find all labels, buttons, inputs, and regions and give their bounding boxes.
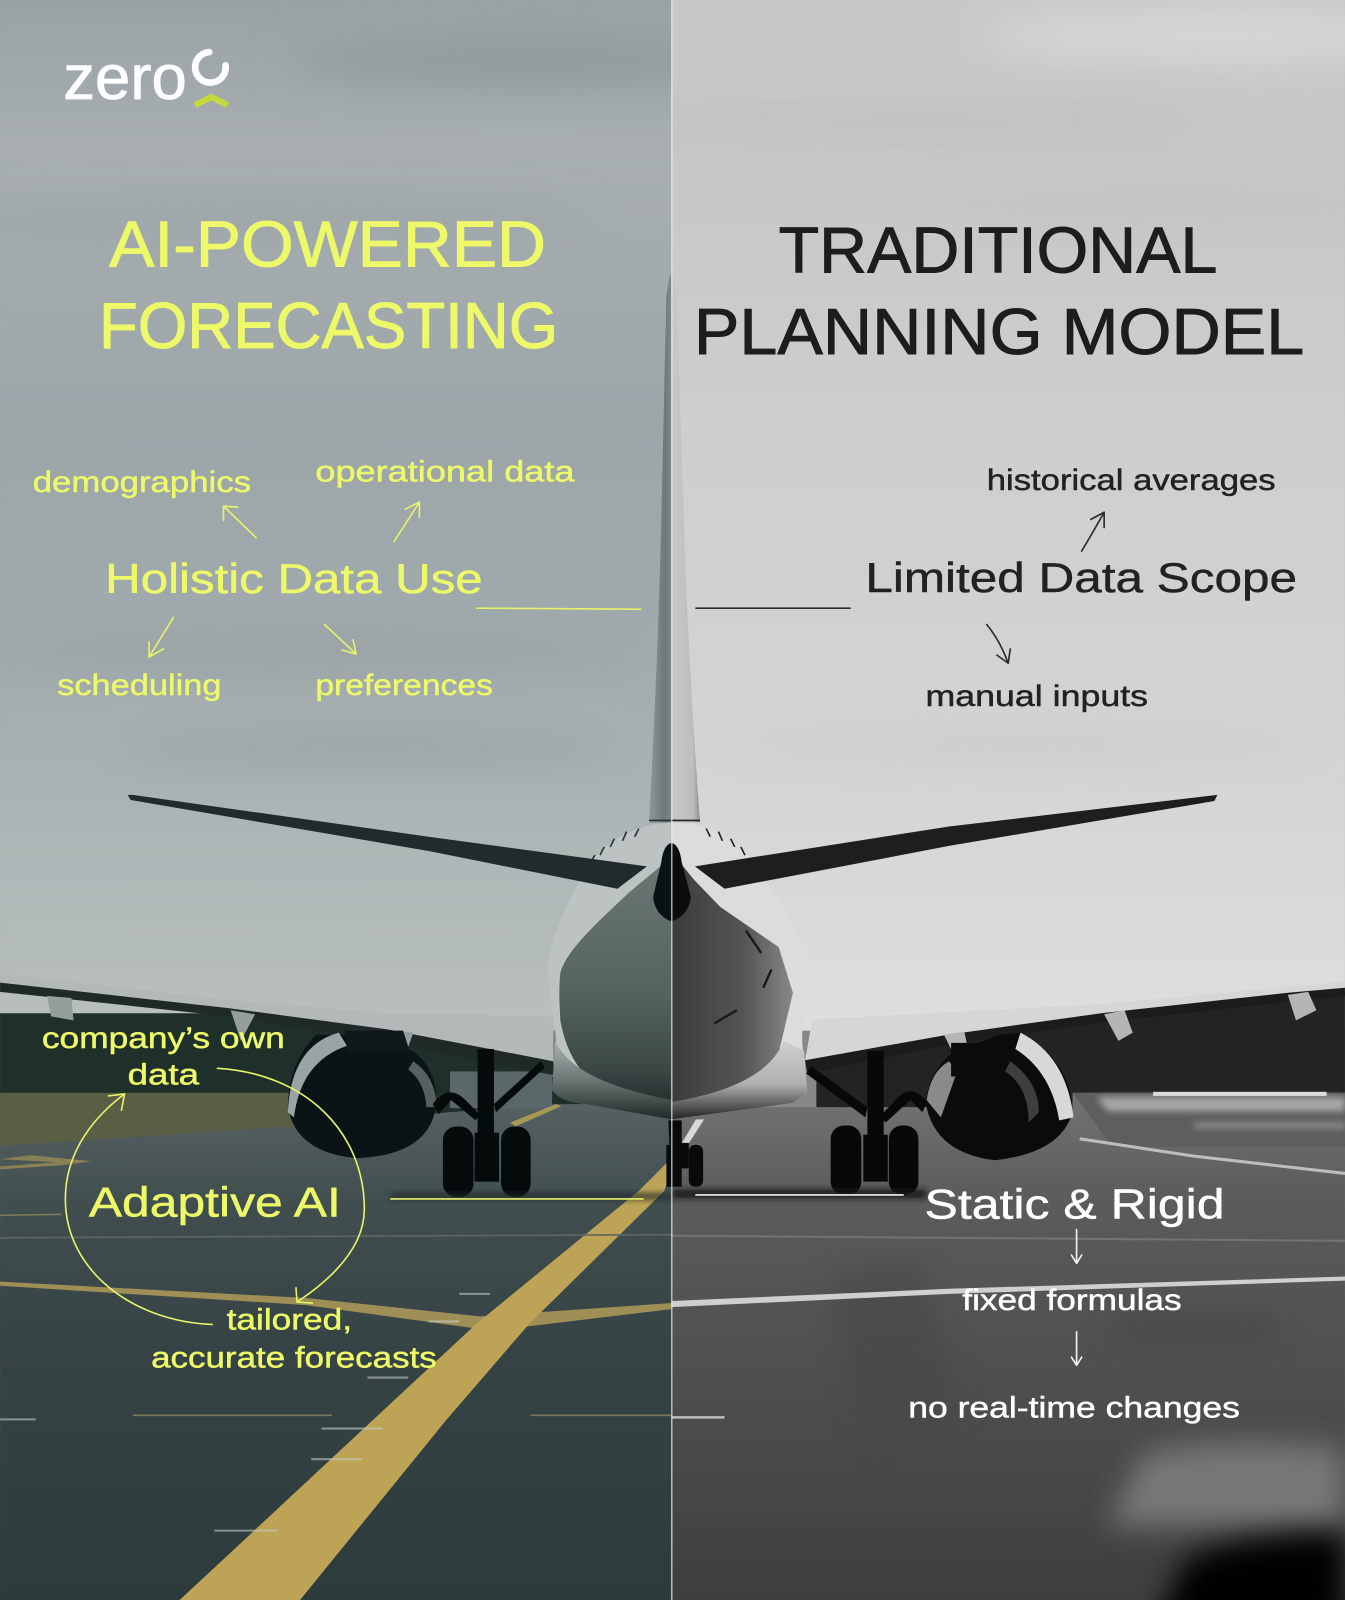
panel: traditional photo side [612, 0, 1345, 1600]
wing fairings [944, 992, 1316, 1050]
heading: traditional planning model [694, 213, 1304, 368]
runway markings right [671, 1139, 1345, 1417]
panel: adaptive AI cycle [42, 1022, 643, 1374]
heading: AI-powered forecasting: FORECASTING [99, 289, 558, 362]
connector line static [696, 1194, 903, 1196]
subheading: Holistic Data Use: Holistic Data Use [105, 555, 483, 602]
heading: traditional planning model: PLANNING MODEL [694, 295, 1304, 368]
lower fairing [552, 1041, 671, 1119]
left stabiliser [128, 795, 647, 889]
connector line left [477, 608, 641, 609]
grass left [0, 1093, 306, 1146]
right wing [805, 1030, 977, 1060]
arrow: to historical averages [1082, 512, 1104, 551]
tarmac left [0, 1104, 671, 1600]
label: company's own data: company’s own [42, 1022, 285, 1055]
shadow patches on tarmac [829, 1257, 1276, 1437]
icon: logo chevron [195, 97, 228, 105]
blur patches [1107, 1442, 1345, 1600]
vertical tail [649, 273, 671, 822]
main gear left [433, 1049, 545, 1197]
tarmac right [671, 1093, 1345, 1600]
arrow: to operational data [394, 502, 419, 542]
subheading: Adaptive AI: Adaptive AI [89, 1178, 341, 1225]
label: operational data: operational data [315, 456, 575, 489]
belly [559, 857, 671, 1107]
lower fairing [671, 1041, 807, 1119]
fuselage details [714, 931, 771, 1023]
plane left half [0, 273, 671, 1197]
sky right [612, 0, 1345, 1031]
arrow: to no real-time changes [1071, 1332, 1082, 1365]
connector line right [696, 607, 850, 609]
label: historical averages: historical averages [987, 464, 1276, 497]
heading: AI-powered forecasting: AI-POWERED [109, 207, 546, 280]
divider line [671, 0, 672, 1600]
distant building left [450, 1071, 552, 1108]
right stabiliser [695, 795, 1217, 889]
ground shadow right [671, 1190, 927, 1198]
panel: limited data scope [696, 464, 1297, 713]
runway markings left [0, 1104, 671, 1600]
vertical tail [672, 370, 700, 822]
heading: traditional planning model: TRADITIONAL [779, 213, 1217, 286]
fuselage [672, 1030, 808, 1120]
engine right [926, 1033, 1074, 1160]
subheading: Static & Rigid: Static & Rigid [925, 1180, 1225, 1227]
tail base line and ticks [671, 820, 745, 855]
arrow: to manual inputs [987, 624, 1010, 663]
label: manual inputs: manual inputs [926, 680, 1148, 713]
arrow: cycle right [217, 1068, 364, 1303]
nose gear left [666, 1120, 671, 1187]
fuselage [548, 822, 671, 1119]
grass right [1072, 1092, 1345, 1147]
label: tailored, accurate forecasts [151, 1304, 437, 1374]
subheading: Limited Data Scope: Limited Data Scope [865, 554, 1297, 601]
label: fixed formulas: fixed formulas [962, 1284, 1182, 1317]
belly [671, 852, 793, 1108]
arrow: to demographics [224, 506, 256, 538]
label: preferences: preferences [315, 669, 493, 702]
label: company's own data: data [128, 1059, 200, 1092]
trees right [816, 992, 1345, 1112]
panel: AI-powered photo side [0, 0, 672, 1600]
ground shadow left [391, 1194, 671, 1199]
exhaust cone [671, 843, 691, 921]
connector line adaptive [391, 1198, 643, 1200]
label: scheduling: scheduling [57, 669, 221, 702]
plane right half [672, 370, 1345, 1195]
wing fairings [47, 996, 414, 1047]
left wing [399, 1030, 554, 1061]
label: no real-time changes: no real-time changes [908, 1391, 1240, 1424]
trees left [0, 1013, 586, 1122]
label: tailored, accurate forecasts: tailored, [227, 1304, 352, 1337]
sky left [0, 0, 672, 1031]
tail base line and ticks [590, 820, 671, 863]
panel: static and rigid [696, 1180, 1240, 1424]
arrow: to preferences [325, 624, 356, 654]
icon: logo arc [195, 52, 226, 83]
panel: holistic data use [33, 456, 641, 702]
arrow: to fixed formulas [1071, 1230, 1082, 1263]
logo: zero: zero [63, 43, 187, 113]
nose gear right [666, 1119, 704, 1187]
arrow: cycle left [65, 1094, 212, 1324]
exhaust cone [653, 843, 671, 921]
engine left [288, 1031, 437, 1158]
label: tailored, accurate forecasts: accurate forecasts [151, 1341, 437, 1374]
main gear right [806, 1051, 927, 1195]
label: company's own data [42, 1022, 285, 1092]
arrow: to scheduling [149, 617, 174, 657]
heading: AI-powered forecasting [99, 207, 558, 362]
label: demographics: demographics [33, 466, 251, 499]
